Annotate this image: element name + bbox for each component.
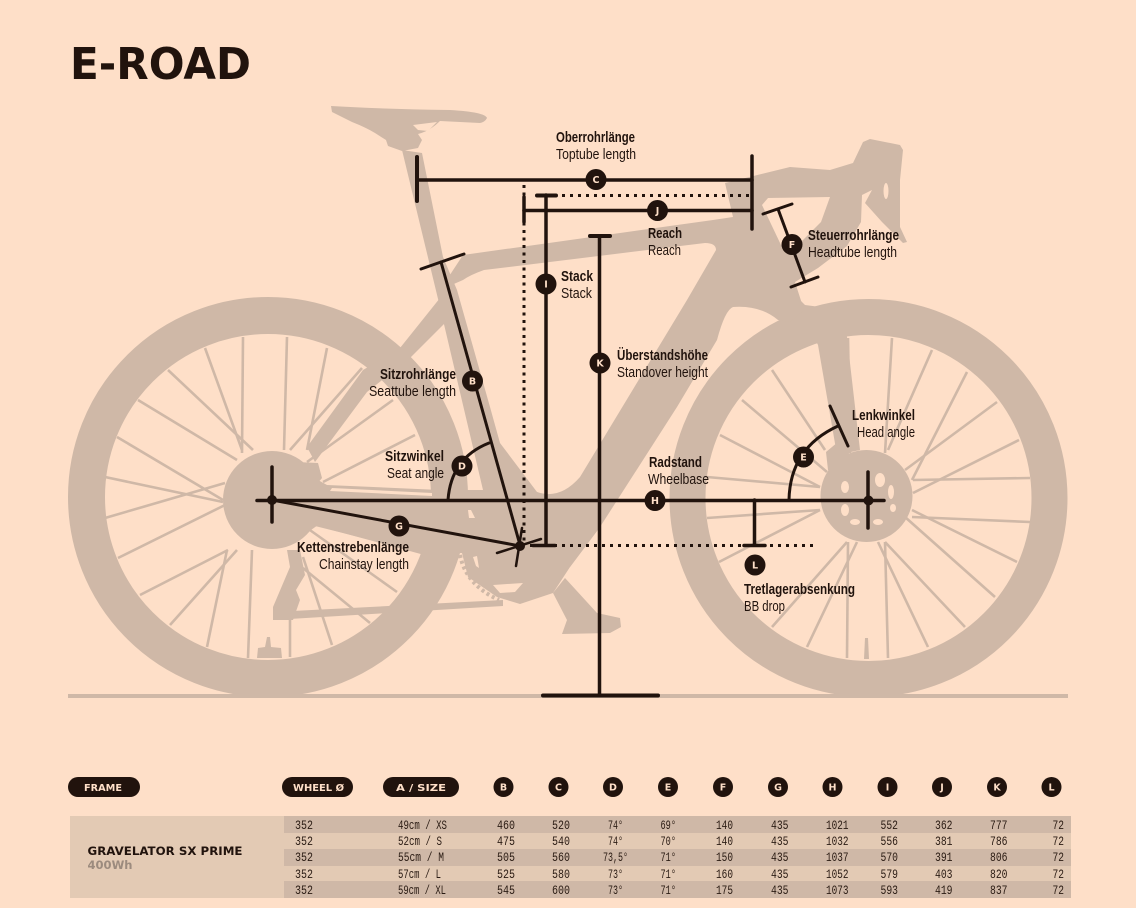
E head angle arc bbox=[789, 406, 848, 500]
frame name panel: 400Wh bbox=[88, 858, 132, 872]
label: stack: Stack bbox=[561, 285, 592, 302]
I stack line bbox=[533, 195, 556, 546]
pill: size bbox=[383, 777, 459, 797]
row 52cm S: 1032 bbox=[826, 835, 848, 849]
label: wheelbase bbox=[648, 454, 709, 488]
row 49cm XS: 777 bbox=[990, 819, 1008, 833]
column badge L bbox=[1042, 777, 1062, 797]
row 59cm XL bbox=[295, 884, 1064, 898]
label: head angle: Head angle bbox=[857, 424, 915, 441]
table header bbox=[68, 777, 1062, 797]
row 59cm XL: 435 bbox=[771, 884, 788, 898]
J reach line bbox=[524, 197, 752, 222]
row 52cm S: 140 bbox=[716, 835, 733, 849]
bike silhouette bbox=[68, 106, 1068, 698]
label: standover height: Standover height bbox=[617, 364, 709, 381]
pill: wheel: WHEEL Ø bbox=[293, 782, 344, 794]
row 59cm XL: 419 bbox=[935, 884, 952, 898]
row 59cm XL: 593 bbox=[880, 884, 898, 898]
row 57cm L: 435 bbox=[771, 868, 788, 882]
row 55cm M bbox=[295, 851, 1064, 865]
label: stack bbox=[561, 268, 594, 302]
badge K bbox=[590, 352, 610, 374]
L BB drop line bbox=[744, 500, 765, 546]
G chainstay line bbox=[272, 500, 520, 546]
row 57cm L: 352 bbox=[295, 868, 313, 882]
row 52cm S: 540 bbox=[552, 835, 570, 849]
label: reach: Reach bbox=[648, 225, 682, 242]
label: stack: Stack bbox=[561, 268, 594, 285]
row 59cm XL: 175 bbox=[716, 884, 733, 898]
badge E: E bbox=[800, 452, 807, 464]
ground line bbox=[68, 694, 1068, 698]
row 59cm XL: 59cm / XL bbox=[398, 884, 446, 898]
badge B bbox=[462, 370, 483, 392]
column badge I bbox=[878, 777, 898, 797]
row 57cm L bbox=[295, 868, 1064, 882]
row 49cm XS: 140 bbox=[716, 819, 733, 833]
front wheel bbox=[688, 290, 1050, 679]
column badge G: G bbox=[774, 782, 782, 794]
label: seattube length: Seattube length bbox=[369, 383, 456, 400]
label: headtube length bbox=[808, 227, 899, 261]
crank and pedal bbox=[553, 578, 621, 634]
chainstay bbox=[300, 470, 520, 560]
label: seat angle bbox=[385, 448, 444, 482]
label: chainstay length: Kettenstrebenlänge bbox=[297, 539, 409, 556]
row 49cm XS: 362 bbox=[935, 819, 952, 833]
row 55cm M: 72 bbox=[1052, 851, 1064, 865]
label: headtube length: Headtube length bbox=[808, 244, 897, 261]
row 59cm XL: 1073 bbox=[826, 884, 848, 898]
row 59cm XL: 71° bbox=[660, 884, 676, 898]
row 57cm L: 71° bbox=[660, 868, 676, 882]
label: chainstay length: Chainstay length bbox=[319, 556, 409, 573]
column badge E: E bbox=[665, 782, 671, 794]
label: reach bbox=[648, 225, 682, 259]
pill: size: A / SIZE bbox=[396, 783, 446, 794]
H wheelbase line bbox=[257, 499, 884, 502]
F headtube line bbox=[763, 204, 818, 287]
row 52cm S: 52cm / S bbox=[398, 835, 442, 849]
label: toptube length bbox=[556, 129, 636, 163]
badge L bbox=[744, 554, 766, 576]
badge G bbox=[388, 516, 410, 536]
row 57cm L: 160 bbox=[716, 868, 733, 882]
row 59cm XL: 73° bbox=[608, 884, 623, 898]
column badge D bbox=[603, 777, 623, 797]
row 57cm L: 820 bbox=[990, 868, 1008, 882]
row 55cm M: 150 bbox=[716, 851, 733, 865]
row 57cm L: 73° bbox=[608, 868, 623, 882]
badge D bbox=[452, 456, 472, 476]
pill: wheel bbox=[282, 777, 353, 797]
label: BB drop: Tretlagerabsenkung bbox=[744, 581, 855, 598]
label: wheelbase: Wheelbase bbox=[648, 471, 709, 488]
column badge D: D bbox=[609, 782, 617, 794]
label: wheelbase: Radstand bbox=[649, 454, 702, 471]
row 49cm XS: 49cm / XS bbox=[398, 819, 447, 833]
row 49cm XS: 74° bbox=[608, 819, 623, 833]
pill: frame: FRAME bbox=[84, 783, 122, 794]
row 55cm M: 73,5° bbox=[603, 851, 628, 865]
row 52cm S: 475 bbox=[497, 835, 515, 849]
label: standover height: Überstandshöhe bbox=[617, 347, 708, 364]
row 52cm S: 74° bbox=[608, 835, 623, 849]
bottom bracket marker bbox=[497, 528, 541, 566]
column badge E bbox=[658, 777, 678, 797]
label: BB drop bbox=[744, 581, 855, 615]
badge C bbox=[586, 169, 606, 190]
column badge K: K bbox=[993, 782, 1001, 794]
row 49cm XS: 69° bbox=[660, 819, 676, 833]
column badge F: F bbox=[720, 782, 726, 794]
row 49cm XS: 435 bbox=[771, 819, 788, 833]
column badge J: J bbox=[939, 782, 944, 794]
row 59cm XL: 837 bbox=[990, 884, 1008, 898]
badge G: G bbox=[395, 522, 403, 532]
row 52cm S: 72 bbox=[1052, 835, 1064, 849]
row 55cm M: 435 bbox=[771, 851, 788, 865]
geometry lines bbox=[257, 156, 884, 696]
row 55cm M: 505 bbox=[497, 851, 515, 865]
D seat angle arc bbox=[448, 443, 489, 500]
dotted reference lines bbox=[524, 185, 813, 546]
label: seattube length: Sitzrohrlänge bbox=[380, 366, 456, 383]
badge C: C bbox=[593, 175, 600, 186]
row 49cm XS: 1021 bbox=[826, 819, 848, 833]
badge K: K bbox=[596, 358, 604, 370]
column badge C: C bbox=[555, 782, 562, 794]
badge E bbox=[793, 446, 814, 468]
row 52cm S: 381 bbox=[935, 835, 952, 849]
row 55cm M: 55cm / M bbox=[398, 851, 444, 865]
row 52cm S: 352 bbox=[295, 835, 313, 849]
badge J: J bbox=[655, 206, 659, 217]
row 57cm L: 580 bbox=[552, 868, 570, 882]
row 59cm XL: 72 bbox=[1052, 884, 1064, 898]
row 57cm L: 57cm / L bbox=[398, 868, 441, 882]
badge I bbox=[536, 274, 556, 294]
column badge I: I bbox=[886, 782, 889, 794]
C toptube line bbox=[417, 156, 752, 229]
label: toptube length: Toptube length bbox=[556, 146, 636, 163]
row 55cm M: 570 bbox=[880, 851, 898, 865]
column badge B bbox=[494, 777, 514, 797]
row 55cm M: 391 bbox=[935, 851, 952, 865]
front axle marker bbox=[864, 472, 874, 528]
row backgrounds bbox=[284, 816, 1071, 898]
badge H: H bbox=[651, 496, 659, 507]
label: seat angle: Seat angle bbox=[387, 465, 444, 482]
table body bbox=[70, 816, 1071, 898]
row 52cm S: 786 bbox=[990, 835, 1008, 849]
label: toptube length: Oberrohrlänge bbox=[556, 129, 635, 146]
badge B: B bbox=[469, 376, 476, 388]
row 52cm S: 70° bbox=[660, 835, 676, 849]
label: seat angle: Sitzwinkel bbox=[385, 448, 444, 465]
saddle bbox=[331, 106, 487, 151]
row 55cm M: 806 bbox=[990, 851, 1008, 865]
row 52cm S: 556 bbox=[880, 835, 898, 849]
frame name panel bbox=[70, 816, 284, 898]
badge J bbox=[647, 200, 668, 221]
column badge L: L bbox=[1048, 782, 1055, 794]
frame name panel: GRAVELATOR SX PRIME bbox=[88, 844, 243, 858]
row 57cm L: 525 bbox=[497, 868, 515, 882]
row 52cm S: 435 bbox=[771, 835, 788, 849]
row 59cm XL: 600 bbox=[552, 884, 570, 898]
seat tube and seatpost bbox=[402, 150, 537, 560]
badge F: F bbox=[789, 240, 795, 251]
column badge B: B bbox=[500, 782, 507, 794]
label: standover height bbox=[617, 347, 709, 381]
row 55cm M: 560 bbox=[552, 851, 570, 865]
label: seattube length bbox=[369, 366, 456, 400]
frame bbox=[440, 139, 907, 567]
label: reach: Reach bbox=[648, 242, 681, 259]
label: chainstay length bbox=[297, 539, 409, 573]
title: E-ROAD bbox=[70, 39, 251, 90]
row 49cm XS: 460 bbox=[497, 819, 515, 833]
row 59cm XL: 352 bbox=[295, 884, 313, 898]
label: head angle: Lenkwinkel bbox=[852, 407, 915, 424]
row 49cm XS: 520 bbox=[552, 819, 570, 833]
row 49cm XS: 352 bbox=[295, 819, 313, 833]
label: head angle bbox=[852, 407, 915, 441]
B seattube line bbox=[421, 254, 520, 545]
column badge F bbox=[713, 777, 733, 797]
pill: frame bbox=[68, 777, 140, 797]
row 55cm M: 71° bbox=[660, 851, 676, 865]
derailleur bbox=[273, 550, 305, 620]
label: headtube length: Steuerrohrlänge bbox=[808, 227, 899, 244]
column badge H bbox=[822, 777, 842, 797]
column badge H: H bbox=[829, 782, 837, 794]
column badge K bbox=[987, 777, 1007, 797]
column badge J bbox=[932, 777, 952, 797]
row 57cm L: 579 bbox=[880, 868, 898, 882]
rear axle marker bbox=[267, 467, 277, 522]
badge H bbox=[644, 490, 666, 511]
label: BB drop: BB drop bbox=[744, 598, 785, 615]
row 49cm XS bbox=[295, 819, 1064, 833]
row 55cm M: 352 bbox=[295, 851, 313, 865]
column badge G bbox=[768, 777, 788, 797]
row 57cm L: 403 bbox=[935, 868, 952, 882]
row 52cm S bbox=[295, 835, 1064, 849]
row 49cm XS: 552 bbox=[880, 819, 898, 833]
rear wheel bbox=[86, 316, 450, 678]
motor and chainring bbox=[462, 490, 600, 604]
row 57cm L: 1052 bbox=[826, 868, 848, 882]
K standover line bbox=[543, 236, 658, 696]
row 49cm XS: 72 bbox=[1052, 819, 1064, 833]
row 55cm M: 1037 bbox=[826, 851, 848, 865]
column badge C bbox=[548, 777, 568, 797]
row 59cm XL: 545 bbox=[497, 884, 515, 898]
badge D: D bbox=[458, 462, 466, 472]
badge I: I bbox=[544, 280, 548, 290]
row 57cm L: 72 bbox=[1052, 868, 1064, 882]
badge L: L bbox=[752, 560, 758, 572]
seat stays bbox=[307, 298, 445, 462]
badge F bbox=[782, 234, 802, 255]
